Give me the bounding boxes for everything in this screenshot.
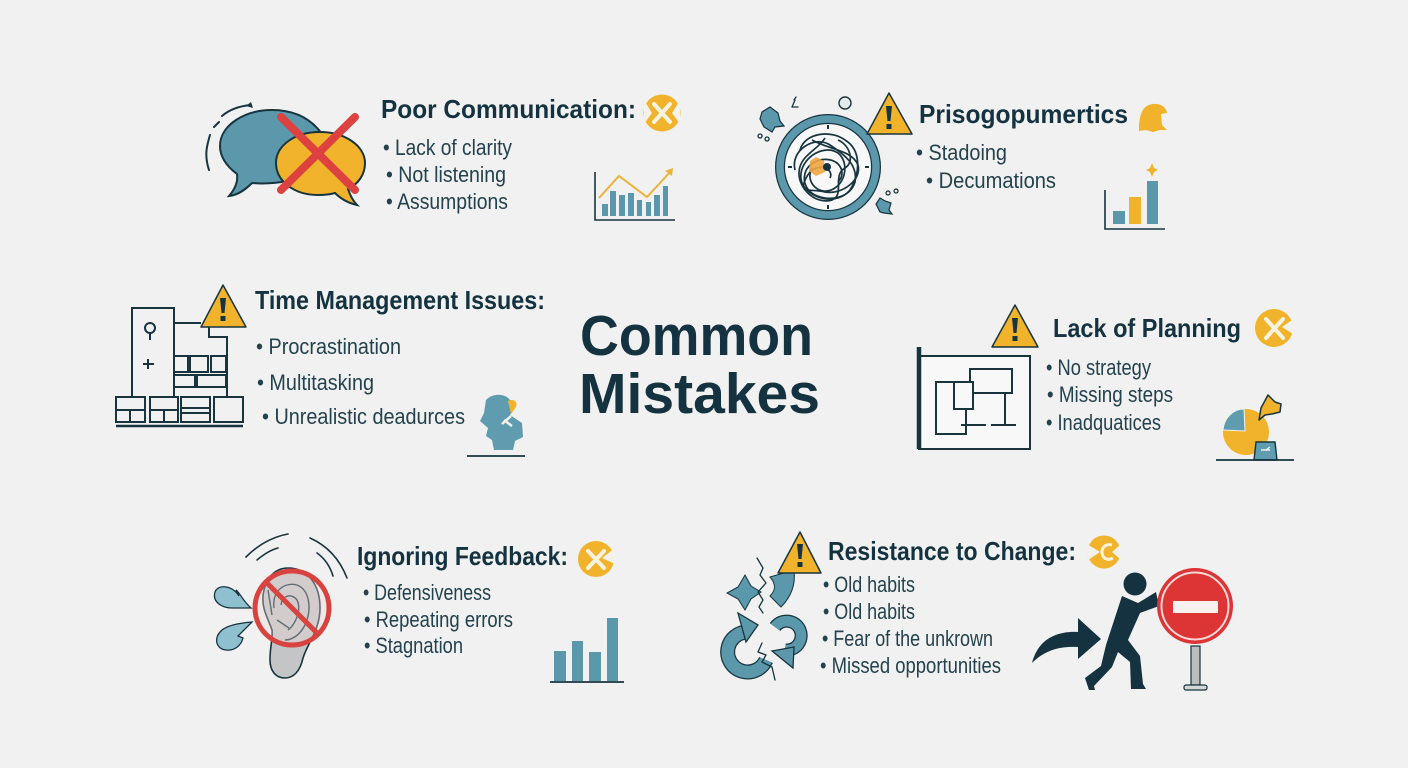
bullet list: • Lack of clarity [383,135,512,160]
bullet list: • Procrastination [256,334,401,359]
bullet list: • Decumations [926,168,1056,193]
panel: lack of planning [919,305,1295,460]
icon: x badge [1255,309,1295,347]
icon: person pushing [1085,572,1159,690]
bullet list [1046,355,1173,435]
bullet list [916,140,1056,193]
title: Mistakes [579,362,820,426]
panel: prisogopumertics [758,93,1167,229]
bullet list: • Assumptions [386,189,508,214]
bullet list: • Multitasking [257,370,374,395]
bullet list [820,572,1001,678]
icon: x badge [578,541,615,577]
icon: brick wall and tower [116,308,243,426]
icon: blocked ear [214,534,347,678]
heading: Lack of Planning [1053,313,1241,343]
icon: x badge [644,94,680,132]
panel: ignoring feedback [214,534,624,682]
arrow [1032,618,1101,663]
bullet list: • Repeating errors [364,607,513,632]
bullet list: • No strategy [1046,355,1151,380]
chart: bars with rising line [595,168,675,220]
panel: poor communication [206,94,681,220]
bullet list: • Stagnation [364,633,463,658]
heading: Prisogopumertics [919,99,1128,129]
title [579,304,820,426]
icon: warning [992,305,1038,347]
icon: crossed speech bubbles [206,102,365,205]
bullet list: • Fear of the unkrown [822,626,993,651]
heading: Ignoring Feedback: [357,541,568,571]
bullet list [383,135,512,214]
bullet list: • Unrealistic deadurces [262,404,465,429]
icon: warning [867,93,912,134]
chart: three bars [1105,163,1165,229]
panel: time management issues [116,285,545,456]
bullet list: • Inadquatices [1046,410,1161,435]
bullet list: • Missing steps [1047,382,1173,407]
icon: broken cycle arrows [727,558,801,680]
icon: pie chart and pedestal [1216,395,1294,460]
bullet list [256,334,465,429]
icon: no entry sign [1157,568,1233,690]
bullet list: • Defensiveness [363,580,491,605]
icon: warning [778,532,821,573]
icon: broken badge [1087,536,1121,568]
bullet list [363,580,513,658]
chart: four bars [550,618,624,682]
icon: tangled clock [758,97,898,215]
bullet list: • Not listening [386,162,506,187]
title: Common [580,304,813,368]
heading: Time Management Issues: [255,285,545,315]
icon: yellow badge [1139,104,1167,132]
bullet list: • Old habits [823,599,915,624]
heading: Poor Communication: [381,94,636,124]
icon: warning [201,285,246,327]
bullet list: • Old habits [823,572,915,597]
bullet list: • Stadoing [916,140,1007,165]
bullet list: • Missed opportunities [820,653,1001,678]
heading: Resistance to Change: [828,536,1076,566]
icon: head silhouette [467,395,525,456]
panel: resistance to change [727,532,1233,690]
icon: blueprint [919,347,1030,449]
